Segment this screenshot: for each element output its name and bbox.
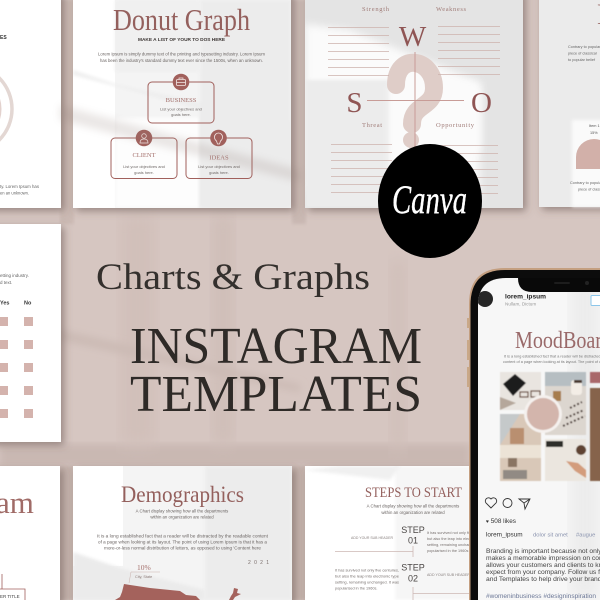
map: USA — [115, 584, 241, 600]
panel: steps to start — [305, 466, 480, 600]
main heading: charts and graphs: Charts & Graphs — [96, 257, 370, 298]
panel: SWOT — [305, 0, 523, 208]
map label — [129, 572, 160, 583]
panel: demographics — [73, 466, 292, 600]
step 02: 02 — [408, 574, 418, 584]
photo: writing hand — [545, 439, 586, 481]
paragraph: of a page when looking at its layout. The point of using Lorem Ipsum is that it has a — [98, 540, 268, 544]
bar: dome — [576, 139, 600, 169]
avatar — [477, 291, 493, 307]
step 02: It has survived not only five centuries, — [335, 568, 399, 572]
step 02 — [335, 562, 470, 600]
box: business — [148, 74, 214, 123]
caption header: lorem_ipsum — [486, 532, 523, 538]
chart label: 15% — [590, 131, 598, 135]
side buttons — [467, 318, 470, 387]
step 01 — [335, 525, 473, 557]
subtitle — [367, 504, 459, 515]
caption header: dolor sit amet — [533, 532, 568, 538]
chart label — [589, 124, 600, 135]
icon: briefcase — [173, 74, 189, 90]
subtitle: within an organization are related — [381, 510, 445, 515]
panel: diagram — [0, 466, 60, 600]
letter W: W — [399, 21, 427, 53]
squares — [0, 317, 33, 418]
notch — [518, 278, 600, 292]
action icons — [485, 498, 530, 509]
card lighting — [73, 466, 208, 597]
step 02: STEP — [401, 562, 425, 572]
post description — [503, 354, 600, 364]
title: STEPS TO START — [365, 485, 462, 501]
phone body — [469, 268, 600, 600]
lower text — [570, 181, 600, 192]
likes: ♥ 508 likes — [486, 518, 516, 525]
card lighting — [73, 0, 197, 208]
card lighting — [305, 24, 480, 208]
body text: ty. Lorem Ipsum has — [0, 184, 39, 189]
box: client: CLIENT — [132, 152, 156, 159]
box: ideas: IDEAS — [209, 154, 229, 162]
body text — [0, 273, 29, 285]
main heading: instagram templates — [130, 318, 422, 423]
box: client — [111, 130, 177, 178]
box: business: BUSINESS — [166, 97, 197, 104]
title: Demographics — [121, 482, 244, 507]
step 01: It has survived not only five — [427, 531, 473, 535]
box: ideas — [186, 130, 252, 178]
top text: piece of classical — [568, 52, 597, 56]
subtitle — [136, 508, 228, 520]
photo: right column — [590, 372, 600, 481]
map label: City, State — [135, 575, 152, 579]
box: client: goals here. — [134, 170, 154, 175]
photo: phone and glasses — [500, 372, 541, 410]
chart label: Item 1 — [589, 124, 600, 128]
percent: 10% — [137, 563, 151, 572]
label: weakness: Weakness — [436, 6, 466, 13]
caption — [486, 548, 600, 583]
photo: coffee and notes — [545, 372, 586, 435]
photo: bedroom — [500, 414, 541, 481]
panel: left ring chart — [0, 0, 61, 208]
paragraph: more-or-less normal distribution of letters, as opposed to using 'Content here — [104, 546, 262, 550]
paragraph: It is a long established fact that a reader will be distracted by the readable content — [97, 534, 269, 538]
box: business: List your objectives and — [160, 106, 202, 112]
subtitle: A Chart display showing how all the departments — [136, 508, 228, 514]
subtitle: A Chart display showing how all the departments — [367, 504, 459, 508]
step 02: ADD YOUR SUB HEADER — [427, 573, 470, 577]
box: ideas: goals here. — [209, 170, 229, 175]
body text: en an unknown. — [0, 190, 29, 196]
letter S: S — [346, 87, 363, 119]
header box: ER TITLE — [0, 594, 20, 599]
main heading: instagram templates: INSTAGRAM — [130, 318, 422, 375]
hashtags: #womeninbusiness #designinspiration — [486, 594, 596, 600]
step 01: popularised in the 1960s — [427, 549, 468, 553]
heading fragment: ES — [0, 35, 7, 41]
step 01: but also the leap into elec — [427, 537, 470, 541]
box: client: List your objectives and — [123, 164, 165, 169]
label: opportunity: Opportunity — [436, 122, 475, 129]
circle swatch — [524, 395, 562, 433]
box: business: goals here. — [171, 112, 191, 117]
title: Donut Graph — [113, 2, 250, 37]
step 01: 01 — [408, 536, 418, 546]
box: ideas: List your objectives and — [198, 164, 240, 169]
paragraph — [97, 534, 269, 550]
step 01: STEP — [401, 525, 425, 535]
badge: canva: Canva — [392, 177, 467, 222]
light overlay — [60, 105, 300, 182]
top text: to popular belief — [568, 58, 596, 62]
label: strength: Strength — [362, 6, 390, 13]
description — [98, 52, 265, 63]
header box — [0, 574, 25, 600]
column headers: No — [24, 300, 32, 306]
subtitle: within an organization are related — [150, 514, 214, 520]
card lighting — [305, 466, 470, 600]
moodboard photos — [500, 372, 600, 481]
follow button — [591, 296, 600, 306]
step 02: setting, remaining unchanged. It was — [335, 580, 399, 584]
account name: lorem_ipsum — [505, 294, 546, 300]
panel: donut graph — [73, 0, 291, 208]
letter O: O — [471, 87, 492, 119]
label: threat: Threat — [362, 122, 382, 129]
post description: It is a long established fact that a reader will be distracted — [504, 354, 600, 358]
step 01: setting, remaining unchan — [427, 543, 470, 547]
main heading: instagram templates: TEMPLATES — [130, 366, 422, 423]
top text — [568, 45, 600, 62]
screen — [477, 278, 600, 600]
panel: yes no table — [0, 224, 61, 442]
badge: canva — [378, 144, 482, 258]
column headers: Yes — [0, 300, 9, 306]
step 01: ADD YOUR SUB HEADER — [351, 536, 393, 540]
column headers — [0, 300, 32, 306]
account name: Nullam, Dictum — [505, 302, 536, 306]
axes — [367, 52, 464, 150]
caption header: #augue — [576, 532, 595, 538]
icon: person — [136, 130, 152, 146]
ring chart — [0, 65, 12, 153]
caption: and Templates to help drive your brand. — [486, 576, 600, 583]
icon: light bulb — [210, 130, 227, 146]
caption header — [486, 532, 596, 538]
phone mockup — [467, 268, 600, 600]
ruled lines — [328, 26, 500, 194]
question mark — [396, 63, 434, 144]
body text: d text. — [0, 280, 12, 285]
year: 2021 — [248, 560, 269, 566]
description: has been the industry's standard dummy text ever since the 1500s, when an unknown. — [100, 58, 263, 63]
body text — [0, 184, 39, 196]
description: Lorem Ipsum is simply dummy text of the printing and typesetting industry. Lorem Ipsum — [98, 52, 265, 56]
panel: right chart card — [539, 0, 600, 207]
step 02: but also the leap into electronic type — [335, 574, 399, 578]
step 02: popularised in the 1960s. — [335, 586, 377, 590]
body text: etting industry. — [0, 273, 29, 278]
account name — [505, 294, 546, 306]
subheading: MAKE A LIST OF YOUR TO DOS HERE — [138, 37, 225, 42]
top text: Contrary to popular — [568, 45, 600, 49]
